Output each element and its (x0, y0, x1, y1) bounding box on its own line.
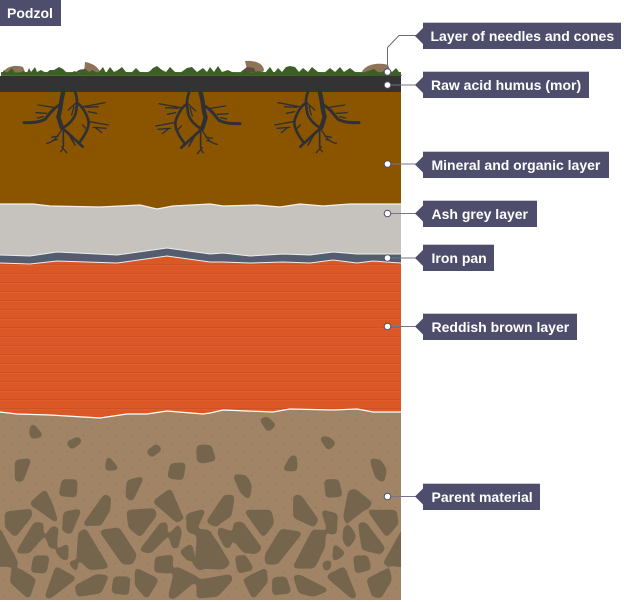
label: Raw acid humus (mor) (384, 71, 589, 98)
label: Layer of needles and cones: Layer of needles and cones (430, 28, 614, 44)
label: Layer of needles and cones (384, 22, 621, 75)
label: Raw acid humus (mor): Raw acid humus (mor) (431, 77, 581, 93)
layer: mineral and organic (0, 90, 401, 210)
layer: ash grey (0, 204, 401, 258)
stone: surface right (361, 64, 391, 74)
label: Iron pan: Iron pan (432, 250, 487, 266)
layer: iron pan (0, 248, 401, 264)
stone: surface left (2, 66, 25, 75)
label: Parent material: Parent material (432, 489, 533, 505)
roots: left tree (24, 92, 108, 153)
stones: surface second (75, 62, 101, 75)
roots: centre tree (156, 93, 240, 154)
layer: raw acid humus (0, 76, 401, 92)
label: Mineral and organic layer (384, 151, 609, 178)
stones: surface third (238, 61, 264, 75)
layer of needles and cones (1, 66, 402, 76)
label: Reddish brown layer: Reddish brown layer (432, 319, 570, 335)
heading: Podzol: Podzol (7, 5, 53, 21)
panel: soil profile (0, 61, 413, 600)
label: Ash grey layer: Ash grey layer (432, 206, 529, 222)
stones: parent material (0, 418, 413, 597)
label: Ash grey layer (384, 200, 537, 227)
label: Mineral and organic layer: Mineral and organic layer (432, 157, 601, 173)
layer: reddish brown (0, 251, 401, 420)
roots: right tree (275, 92, 359, 153)
layer: parent material (0, 409, 401, 600)
label: Parent material (384, 483, 540, 510)
label: Reddish brown layer (384, 313, 577, 340)
heading: Podzol (0, 0, 61, 26)
label: Iron pan (384, 244, 494, 271)
